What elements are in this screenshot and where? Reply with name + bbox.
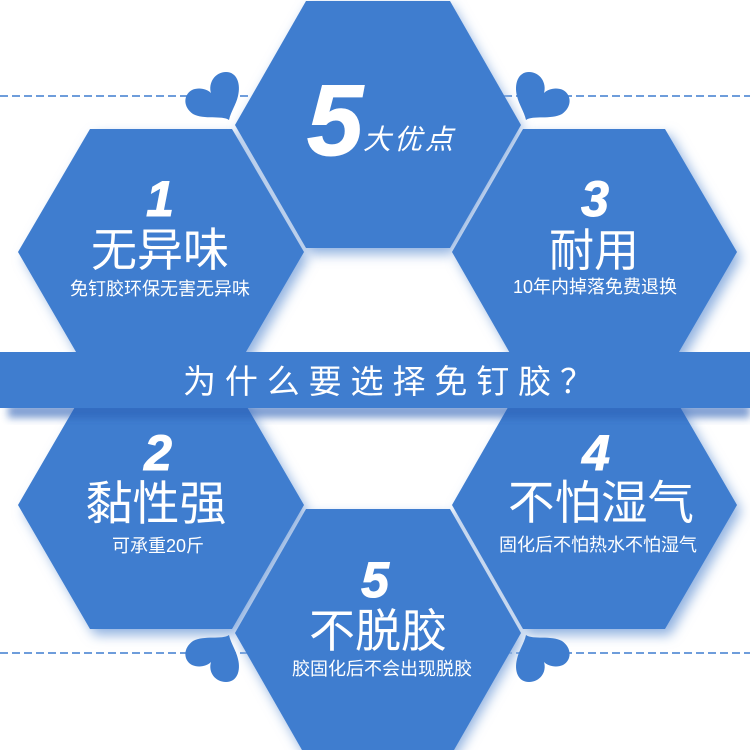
hexagon: 3 durable: 10年内掉落免费退换 [513, 277, 677, 297]
heart: top right [516, 72, 570, 120]
hexagon: 1 no odor: 免钉胶环保无害无异味 [70, 279, 250, 299]
hexagon: 4 moisture proof: 固化后不怕热水不怕湿气 [499, 535, 697, 555]
hexagon: 1 no odor: 无异味 [91, 224, 229, 276]
banner: why choose: 为什么要选择免钉胶？ [183, 363, 593, 400]
banner: why choose [0, 352, 750, 408]
hexagon: 1 no odor [18, 129, 304, 376]
hexagon: 5 no detachment [235, 509, 521, 750]
hexagon: 4 moisture proof: 不怕湿气 [508, 477, 694, 529]
heart: bottom left [185, 635, 239, 682]
hexagon: 1 no odor: 1 [146, 171, 174, 227]
hexagon: 5 no detachment: 不脱胶 [309, 605, 447, 657]
hexagon: 5 advantages: 大优点 [363, 124, 456, 155]
heart: bottom right [516, 635, 570, 682]
hexagon: 2 strong adhesion: 可承重20斤 [112, 536, 204, 556]
heart: top left [185, 72, 239, 120]
hexagon: 5 no detachment: 胶固化后不会出现脱胶 [292, 659, 472, 679]
band shadow [8, 404, 750, 418]
hexagon: 5 advantages [235, 1, 521, 248]
hexagon: 2 strong adhesion [18, 381, 304, 629]
hexagon: 4 moisture proof [452, 381, 737, 629]
hexagon: 3 durable [452, 129, 737, 376]
hexagon: 3 durable: 耐用 [549, 225, 639, 276]
hexagon: 2 strong adhesion: 2 [143, 425, 172, 481]
hexagon: 3 durable: 3 [581, 171, 609, 227]
hexagon: 5 advantages: 5 [307, 65, 365, 177]
hexagon: 2 strong adhesion: 黏性强 [86, 477, 226, 530]
hexagon: 4 moisture proof: 4 [581, 425, 610, 481]
hexagon: 5 no detachment: 5 [361, 552, 390, 608]
